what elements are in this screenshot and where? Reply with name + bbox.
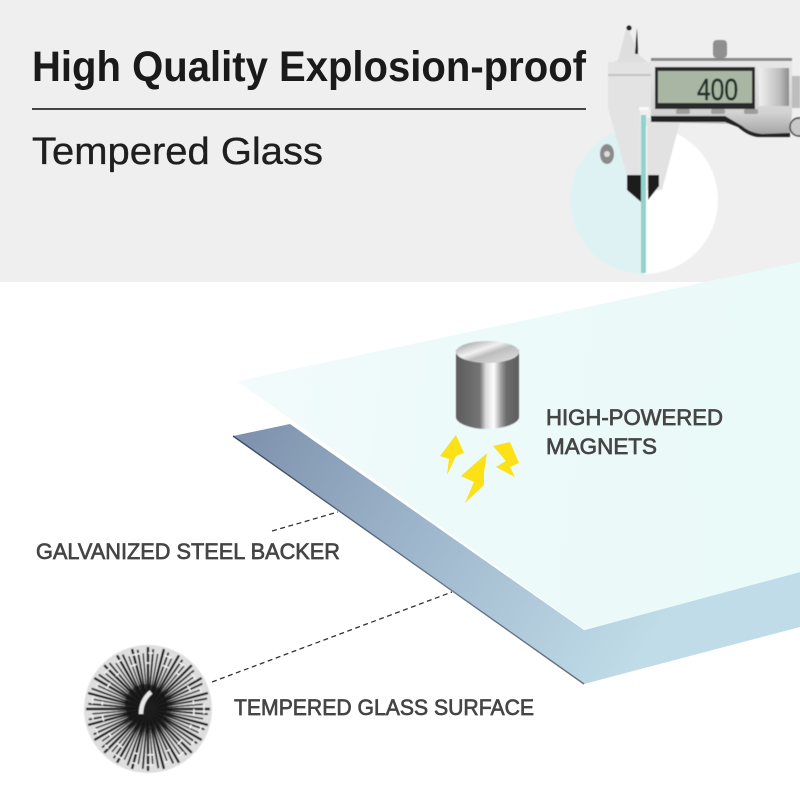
glass edge xyxy=(641,115,646,273)
galvanized steel backer layer xyxy=(233,424,800,684)
leader line: steel backer xyxy=(272,512,338,531)
label: high-powered magnets: HIGH-POWERED xyxy=(546,405,723,430)
icon: caliper measuring glass xyxy=(570,26,800,274)
title divider xyxy=(32,108,586,110)
label: high-powered magnets xyxy=(546,405,723,459)
label: galvanized steel backer: GALVANIZED STEEL BACKER xyxy=(36,539,340,564)
backing circle xyxy=(570,126,718,274)
panel: layered glass diagram xyxy=(233,262,800,684)
leader line: glass surface xyxy=(212,592,452,682)
label: high-powered magnets: MAGNETS xyxy=(546,434,657,459)
title: High Quality Explosion-proof xyxy=(32,43,587,91)
caliper LCD xyxy=(655,67,755,109)
icon: yellow lightning bolts xyxy=(440,435,519,503)
LCD reading: 400 xyxy=(697,72,738,107)
icon: shattered glass xyxy=(83,644,213,774)
subtitle: Tempered Glass xyxy=(32,131,323,173)
tempered glass layer xyxy=(237,262,800,630)
label: tempered glass surface: TEMPERED GLASS SURFACE xyxy=(234,695,534,720)
icon: cylindrical magnet xyxy=(456,341,519,429)
header background xyxy=(0,0,800,282)
caliper jaws xyxy=(600,26,681,202)
caliper body xyxy=(651,40,800,137)
